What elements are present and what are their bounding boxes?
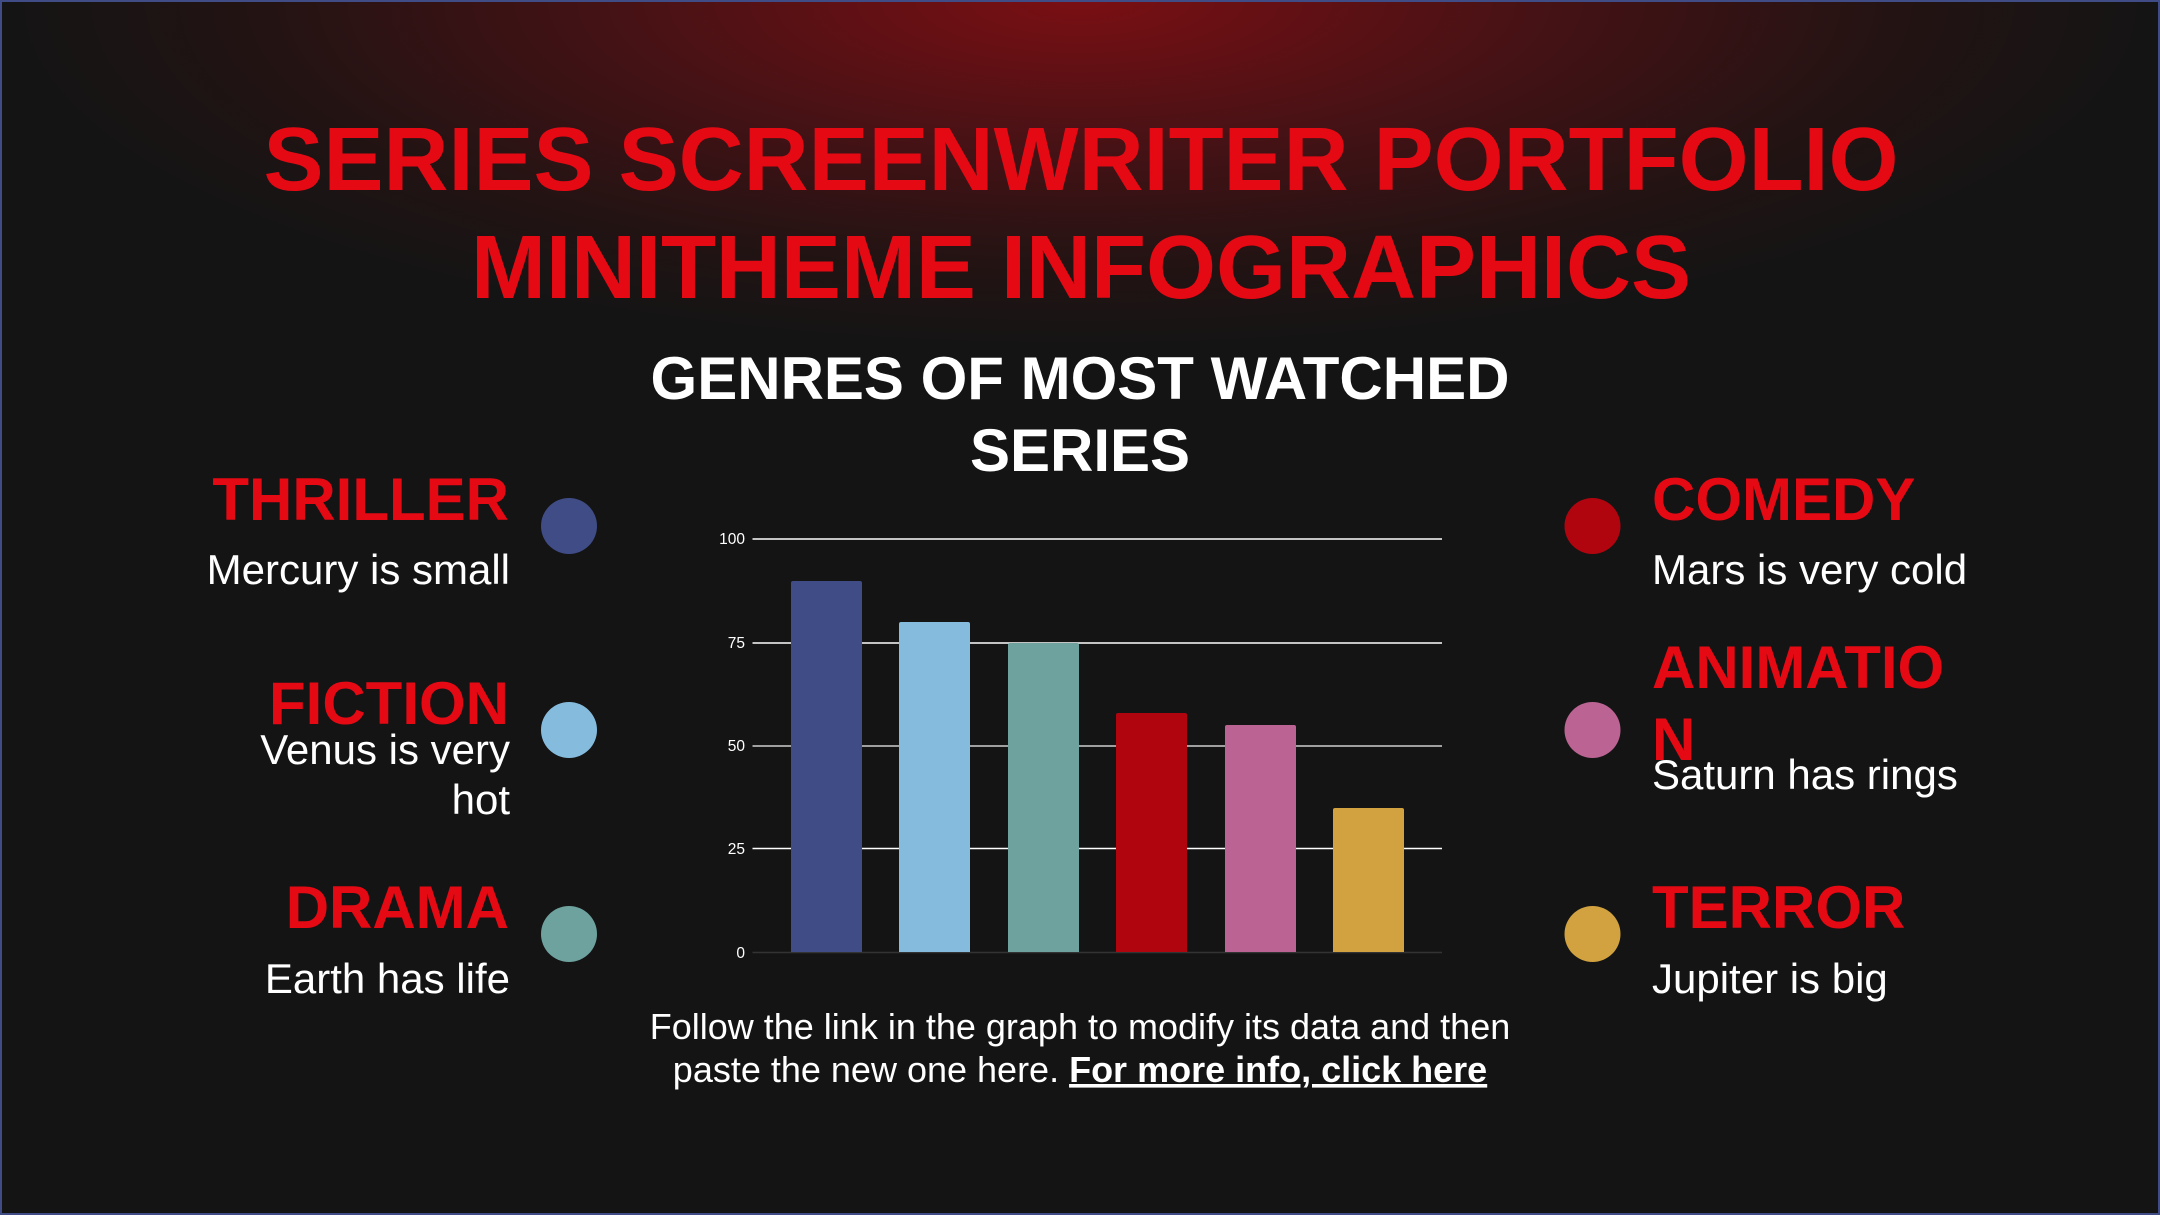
bar: thriller <box>791 581 862 952</box>
legend: drama <box>265 874 597 1002</box>
axis labels: 100 <box>719 531 745 548</box>
legend: comedy: COMEDY <box>1652 466 1915 533</box>
legend: fiction: FICTION <box>269 670 509 737</box>
legend: terror <box>1564 874 1905 1002</box>
legend: thriller: Mercury is small <box>207 546 510 593</box>
legend: fiction <box>260 670 597 823</box>
chart heading: GENRES OF MOST WATCHED <box>651 345 1509 412</box>
legend: animation: N <box>1652 706 1695 773</box>
bar: comedy <box>1116 713 1187 952</box>
title: MINITHEME INFOGRAPHICS <box>471 218 1691 318</box>
axis labels <box>719 531 745 962</box>
legend: drama: DRAMA <box>286 874 509 941</box>
legend: fiction: hot <box>452 776 510 823</box>
axis labels: 25 <box>728 841 745 858</box>
bar: fiction <box>899 622 970 952</box>
bar: terror <box>1333 808 1404 952</box>
axis labels: 50 <box>728 738 745 755</box>
bar: drama <box>1008 643 1079 952</box>
bar chart <box>719 531 1442 962</box>
footer note: Follow the link in the graph to modify its data and then <box>650 1006 1510 1047</box>
legend: terror: TERROR <box>1652 874 1905 941</box>
legend: thriller: THRILLER <box>212 466 509 533</box>
chart heading: SERIES <box>970 417 1190 484</box>
legend: animation: ANIMATIO <box>1652 634 1944 701</box>
legend: fiction: Venus is very <box>260 726 510 773</box>
legend: thriller <box>207 466 597 593</box>
legend: comedy: Mars is very cold <box>1652 546 1967 593</box>
axis labels: 75 <box>728 635 745 652</box>
footer note <box>650 1006 1510 1090</box>
title <box>263 110 1899 318</box>
legend: animation <box>1564 634 1958 798</box>
legend: comedy <box>1564 466 1967 593</box>
legend: drama: Earth has life <box>265 955 510 1002</box>
bar: animation <box>1225 725 1296 952</box>
footer note: paste the new one here. For more info, click here <box>673 1049 1487 1090</box>
legend: terror: Jupiter is big <box>1652 955 1888 1002</box>
chart heading <box>651 345 1509 484</box>
title: SERIES SCREENWRITER PORTFOLIO <box>263 110 1899 210</box>
axis labels: 0 <box>736 945 745 962</box>
legend: animation: Saturn has rings <box>1652 751 1958 798</box>
